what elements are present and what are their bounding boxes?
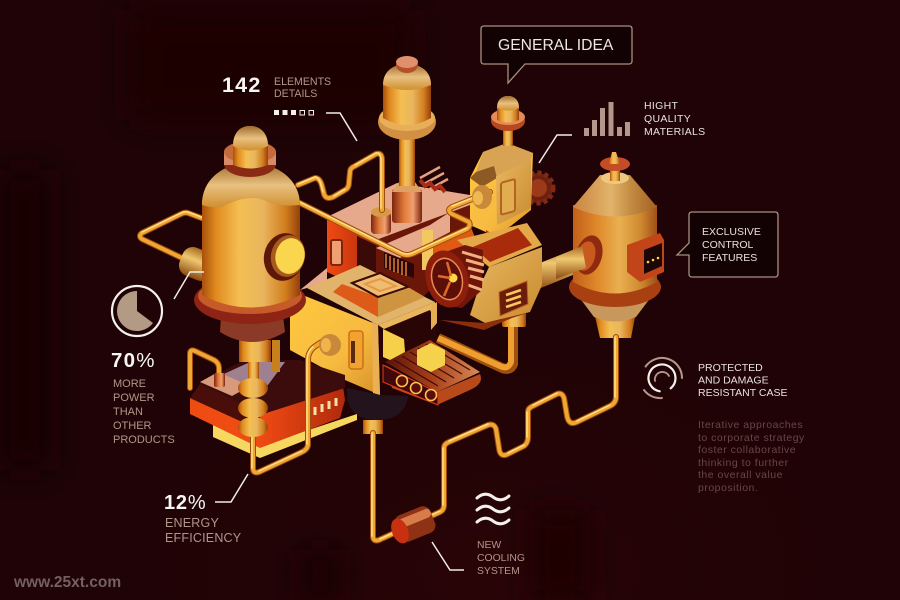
power text: PRODUCTS [113, 434, 175, 446]
callout: exclusive control [677, 212, 778, 277]
leader: bar chart [539, 135, 572, 163]
body text: the overall value [698, 469, 783, 481]
body text: to corporate strategy [698, 432, 805, 444]
dark ball and lower collar [347, 388, 408, 434]
protected text: AND DAMAGE [698, 374, 769, 386]
energy text: ENERGY [165, 516, 219, 530]
upper zigzag pipe [298, 153, 382, 210]
leader: efficiency [215, 474, 248, 502]
protected text: RESISTANT CASE [698, 387, 787, 399]
fan wheel [419, 245, 484, 312]
small valve on platform [371, 207, 391, 234]
70 percent stat: 70% [111, 349, 156, 372]
callout: exclusive control: EXCLUSIVE [702, 226, 761, 238]
energy text: EFFICIENCY [165, 531, 242, 545]
bar chart icon [584, 102, 630, 136]
lower left stem and pipe [238, 334, 341, 472]
cooling text: COOLING [477, 553, 525, 564]
main long pipe [300, 191, 490, 255]
right main tank [556, 152, 664, 338]
callout: exclusive control: FEATURES [702, 252, 757, 264]
body text: thinking to further [698, 457, 789, 469]
pipe under mid box [438, 310, 526, 369]
control box [627, 233, 664, 282]
icon: cooling waves [477, 494, 509, 524]
power text: OTHER [113, 420, 152, 432]
left main tank [194, 126, 309, 342]
body text: proposition. [698, 482, 758, 494]
lower left block [190, 360, 357, 458]
cooling text [477, 540, 525, 577]
power text: THAN [113, 406, 143, 418]
watermark: www.25xt.com [13, 574, 121, 591]
cooling text: NEW [477, 540, 501, 551]
cooling text: SYSTEM [477, 566, 520, 577]
leader: elements [326, 113, 357, 141]
power text: POWER [113, 392, 155, 404]
icon: pie 70% [112, 286, 162, 336]
middle platform [300, 183, 480, 300]
box opening interior [380, 305, 437, 364]
quality text: MATERIALS [644, 126, 705, 138]
callout: exclusive control: CONTROL [702, 239, 753, 251]
quality text: HIGHT [644, 100, 678, 112]
leader: pie [174, 272, 204, 299]
front yellow box [290, 265, 437, 395]
right mid box [419, 223, 542, 330]
top centre tank [378, 56, 436, 223]
142 number: 142 [222, 73, 261, 97]
left side loop pipe [140, 212, 204, 258]
pipe nozzle [472, 185, 492, 209]
side latch [349, 331, 363, 369]
quality text [644, 100, 705, 138]
body text [698, 419, 805, 494]
elements details label: ELEMENTS [274, 76, 331, 88]
icon: protection rings [644, 358, 682, 398]
vent plate [499, 281, 528, 316]
power text [113, 378, 175, 446]
left nub [176, 244, 218, 284]
callout: general idea [481, 26, 632, 83]
porthole [259, 229, 309, 285]
roof detail [333, 273, 425, 317]
machine illustration [140, 56, 664, 546]
energy text [165, 516, 242, 545]
copper coils [420, 167, 448, 192]
back right gear [523, 173, 553, 203]
elements details label: DETAILS [274, 88, 317, 100]
small loop pipe [190, 350, 225, 388]
long lower pipe [372, 337, 616, 540]
protected text [698, 362, 787, 399]
conveyor belt [383, 340, 481, 405]
cube 1 [383, 329, 405, 360]
body text: foster collaborative [698, 444, 796, 456]
protected text: PROTECTED [698, 362, 763, 374]
flange of feed pipe [556, 232, 607, 279]
horizontal feed pipe [535, 245, 590, 290]
elements details label [274, 76, 331, 100]
callout: general idea: GENERAL IDEA [498, 37, 614, 54]
annotation: 142 elements [222, 73, 331, 115]
small top-right unit [470, 96, 533, 250]
quality text: QUALITY [644, 113, 691, 125]
cube 2 [417, 343, 445, 372]
body text: Iterative approaches [698, 419, 803, 431]
power text: MORE [113, 378, 146, 390]
12 percent stat: 12% [164, 492, 206, 514]
rating squares [274, 110, 314, 115]
copper cylinder [388, 504, 438, 546]
leader: cooling [432, 542, 464, 570]
